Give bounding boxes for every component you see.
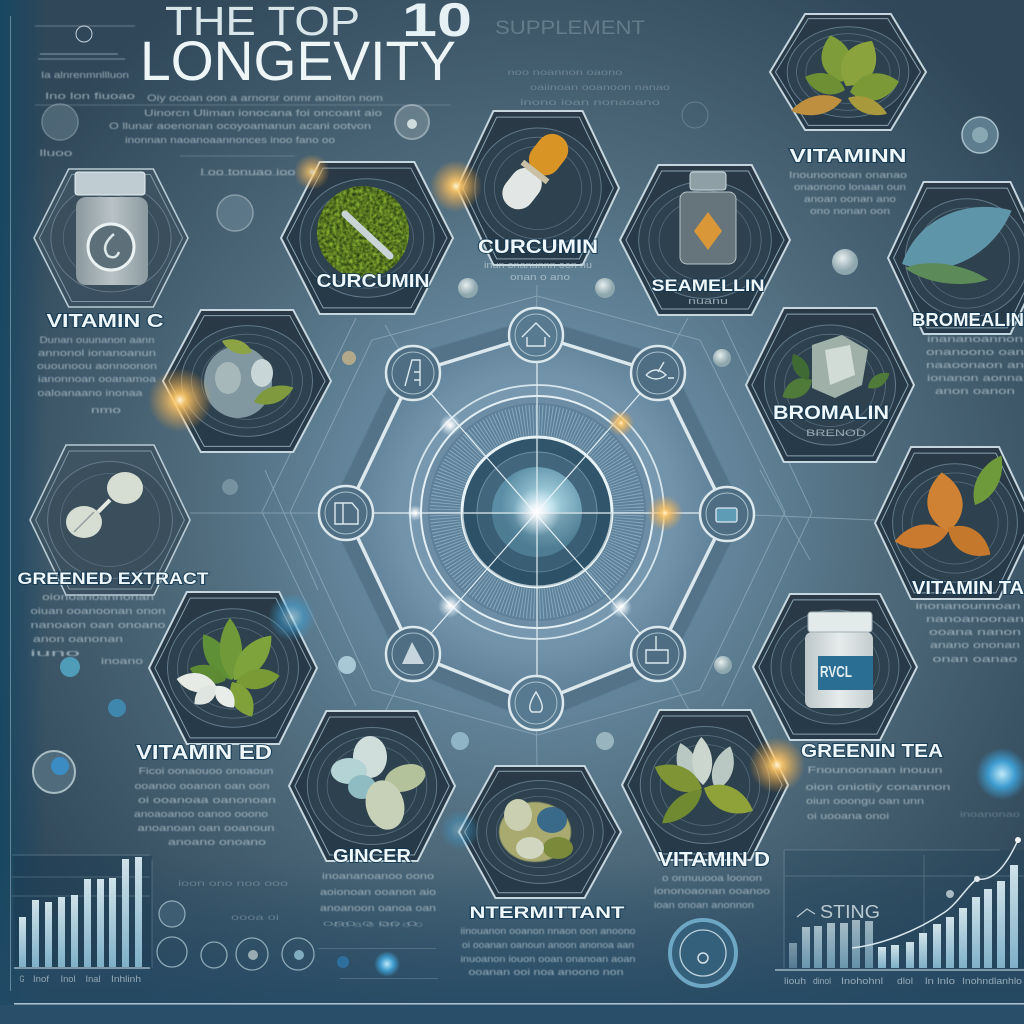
icon: white jar xyxy=(805,612,873,708)
connector lines xyxy=(190,285,875,770)
panel: vitamin c bottle xyxy=(34,169,188,416)
axis labels: Inohndlanhlo xyxy=(962,976,1022,987)
icon: blue leaf xyxy=(891,188,1022,289)
panel: vitamin leaves top right xyxy=(770,14,926,217)
icon: pale blend with leaves xyxy=(204,335,296,418)
intro text block: Uinorcn Uliman ionocana foi oncoant aio xyxy=(144,108,382,119)
text block: ooanan ooi noa anoono non xyxy=(468,967,624,978)
icon: jar with amber label xyxy=(680,172,736,264)
text block: inoanonao xyxy=(960,809,1020,819)
text block: ooanoo ooanon oan oon xyxy=(134,781,270,792)
text block xyxy=(320,871,436,929)
intro text block: O llunar aoenonan ocoyoamanun acani ootvon xyxy=(109,121,371,132)
text block: anoanoan oan ooanoun xyxy=(138,823,274,834)
intro text block xyxy=(35,26,450,178)
text block: oi ooanoaa oanonoan xyxy=(138,795,276,806)
intro text block: lluoo xyxy=(40,148,72,159)
label: GINCER xyxy=(333,846,411,866)
decorative round icons top: inono ioan nonaoano xyxy=(520,97,660,107)
title: LONGEVITY xyxy=(140,29,456,92)
icon: bottle xyxy=(75,172,148,285)
heading xyxy=(797,902,880,922)
panel: seamellin xyxy=(620,165,790,315)
text block: oiun ooongu oan unn xyxy=(806,796,924,807)
icon: green powder with pestle xyxy=(317,186,409,278)
intro text block: Ia alnrenmnllluon xyxy=(41,70,129,81)
icon: crystals and leaves xyxy=(778,335,893,405)
label: VITAMIN D xyxy=(658,849,770,871)
panel: seamellin: nuanu xyxy=(688,296,728,307)
axis labels: ln lnlo xyxy=(925,976,955,987)
label: VITAMIN C xyxy=(46,311,164,331)
text block: inananoannon xyxy=(927,334,1023,345)
decorative round icons top: noo noannon oaono xyxy=(508,67,623,77)
text block xyxy=(926,334,1024,397)
intro text block: Ino lon fiuoao xyxy=(45,91,135,102)
panel: greened extract xyxy=(18,445,209,667)
label: VITAMIN TA xyxy=(912,578,1024,598)
icon node: left xyxy=(319,486,373,540)
text block: oionoanoannonan xyxy=(42,592,154,603)
text block: oi uooana onoi xyxy=(807,811,889,822)
text block: onan oanao xyxy=(932,654,1018,665)
text block: nanoaon oan onoano xyxy=(30,620,166,631)
text block: ioan onoan anonnon xyxy=(654,900,754,911)
text block: anoan oonan ano xyxy=(804,194,896,205)
text block: oi ooanan oanoun anoon anonoa aan xyxy=(462,940,634,951)
text block: nanoanoonan xyxy=(926,614,1024,625)
label: GREENED EXTRACT xyxy=(18,569,209,588)
text block: ouounoou aonnoonon xyxy=(37,361,157,372)
icon node: lower right xyxy=(631,627,685,681)
text block: iononoaonan ooanoo xyxy=(654,886,770,897)
panel: bromalin crystals xyxy=(746,308,914,462)
text block: anoaoanoo oanoo ooono xyxy=(134,809,268,820)
label: CURCUMIN xyxy=(316,271,430,291)
text block xyxy=(460,926,636,978)
text block: anoanoon oanoa oan xyxy=(320,903,436,914)
text block: Dunan ouunanon aann xyxy=(40,335,154,346)
sparkles xyxy=(407,410,683,618)
trend line xyxy=(852,840,1018,948)
text block: oiuan ooanoonan onon xyxy=(30,606,166,617)
panel: intermittent xyxy=(459,766,636,978)
icon: pale flower xyxy=(331,736,429,834)
intro text block: Oiy ocoan oon a arnorsr onmr anoiton nom xyxy=(147,93,383,104)
title: SUPPLEMENT xyxy=(495,18,645,39)
icon node: upper right xyxy=(631,346,685,400)
axis labels: Inohohnl xyxy=(841,976,883,987)
text block: oo a o ion o o xyxy=(333,919,423,929)
text block: anon oanon xyxy=(935,386,1015,397)
panel: curcumin capsule: onan o ano xyxy=(510,272,570,283)
panel: vitamin ta orange leaves xyxy=(875,447,1024,665)
text block xyxy=(30,592,166,667)
text block xyxy=(654,873,770,911)
label: VITAMIN ED xyxy=(136,742,272,764)
text block: inoano xyxy=(101,656,143,667)
bottom icon row: ono o oo o xyxy=(322,918,418,928)
text block: oion oniotiiy conannon xyxy=(806,782,950,793)
label: CURCUMIN xyxy=(478,237,598,258)
axis labels: Inhlinh xyxy=(111,974,141,985)
panel: curcumin powder xyxy=(281,162,453,314)
label: SEAMELLIN xyxy=(652,276,764,295)
text block: ono nonan oon xyxy=(810,206,890,217)
icon: orange leaves xyxy=(893,451,1011,565)
panel: bromelain blue leaf xyxy=(888,182,1024,397)
ring icon bottom center xyxy=(670,920,736,986)
panel: vitamin c blend xyxy=(163,310,331,452)
right bar chart with trend line xyxy=(775,837,1024,987)
label: BROMALIN xyxy=(773,403,889,424)
axis labels: dinol xyxy=(813,976,831,987)
icon: blue glow sphere right xyxy=(976,748,1024,800)
axis labels: liouh xyxy=(784,976,806,987)
text block: o onnuuooa loonon xyxy=(662,873,762,884)
text block: naaoonaon an xyxy=(926,360,1024,371)
text block: Inounoonoan onanao xyxy=(789,170,907,181)
bottom icon row xyxy=(157,878,438,979)
icon: olive leaves with pale flowers xyxy=(650,737,758,831)
text block: iinouanon ooanon nnaon oon anoono xyxy=(460,926,636,937)
panel: curcumin capsule xyxy=(457,111,619,283)
axis labels: Inof xyxy=(33,974,49,985)
icon: mixed blob xyxy=(499,799,573,862)
text block: anon oanonan xyxy=(33,634,123,645)
icon: green leaves with white flower xyxy=(175,618,281,722)
heading: STING xyxy=(820,902,880,922)
icon node: top xyxy=(509,308,563,362)
central hub diagram xyxy=(319,308,754,730)
icon node: lower left xyxy=(386,627,440,681)
decorative round icons top xyxy=(42,26,998,231)
text block: inonanounnoan xyxy=(916,601,1020,612)
text block: oaloanaano inonaa xyxy=(38,388,143,399)
text block: ianonnoan ooanamoa xyxy=(38,374,157,385)
axis labels: G xyxy=(20,974,24,985)
label: VITAMINN xyxy=(790,146,906,166)
text block: Ficoi oonaouoo onoaoun xyxy=(138,766,274,777)
label: NTERMITTANT xyxy=(470,903,625,922)
intro text block: inonnan naoanoaannonces inoo fano oo xyxy=(125,135,335,146)
icon: capsule xyxy=(496,127,575,216)
axis labels: Inal xyxy=(86,974,100,985)
icon: two tablets xyxy=(66,472,143,538)
text block: inun onanunnn oon nu xyxy=(484,260,592,271)
cross lines xyxy=(346,335,727,703)
text block xyxy=(806,765,1020,822)
icon node: bottom xyxy=(509,676,563,730)
icon node: upper left xyxy=(386,346,440,400)
text block: anoano onoano xyxy=(168,837,266,848)
icon node: right xyxy=(700,487,754,541)
label: GREENIN TEA xyxy=(801,741,943,761)
text block xyxy=(916,601,1024,665)
text block: ooana nanon xyxy=(929,627,1021,638)
small spheres xyxy=(33,249,858,793)
panel: bromalin crystals: BRENOD xyxy=(806,428,866,439)
intro text block: l oo tonuao ioo xyxy=(200,167,296,178)
text block: annonol ionanoanun xyxy=(38,348,156,359)
decorative round icons top: oaiinoan ooanoon nanao xyxy=(530,82,670,92)
title xyxy=(140,0,645,92)
text block: inoananoanoo oono xyxy=(322,871,434,882)
panel: ginger xyxy=(289,711,455,929)
text block: ionanon aonna xyxy=(927,373,1024,384)
text block: Fnounoonaan inouun xyxy=(808,765,942,776)
axis labels: Inol xyxy=(60,974,76,985)
axis labels xyxy=(20,974,141,985)
text block: aoionoan ooanon aio xyxy=(320,887,436,898)
text block xyxy=(789,170,907,217)
panel: vitamin ed xyxy=(134,592,317,848)
label: BROMEALIN xyxy=(912,310,1024,330)
glow flares xyxy=(148,154,805,850)
text block: nmo xyxy=(91,405,121,416)
panel: vitamin d leaves xyxy=(622,710,788,911)
bottom icon row: ioon ono noo ooo xyxy=(178,878,288,888)
axis labels xyxy=(784,976,1022,987)
text block xyxy=(37,335,157,416)
icon: white jar: RVCL xyxy=(820,664,852,681)
text block: onanoono oan xyxy=(926,347,1024,358)
left bar chart xyxy=(12,855,152,985)
icon: green leaves xyxy=(789,32,902,121)
text block: onaonono lonaan oun xyxy=(794,182,906,193)
text block: iuno xyxy=(30,648,80,659)
panel: jar xyxy=(753,594,1020,822)
text block: inuoanon iouon ooan onanoan aoan xyxy=(460,954,636,965)
text block: anano ononan xyxy=(930,640,1020,651)
concentric rings xyxy=(410,385,664,639)
text block xyxy=(134,766,276,848)
bottom icon row: oooa oi xyxy=(231,912,279,922)
axis labels: dlol xyxy=(897,976,913,987)
